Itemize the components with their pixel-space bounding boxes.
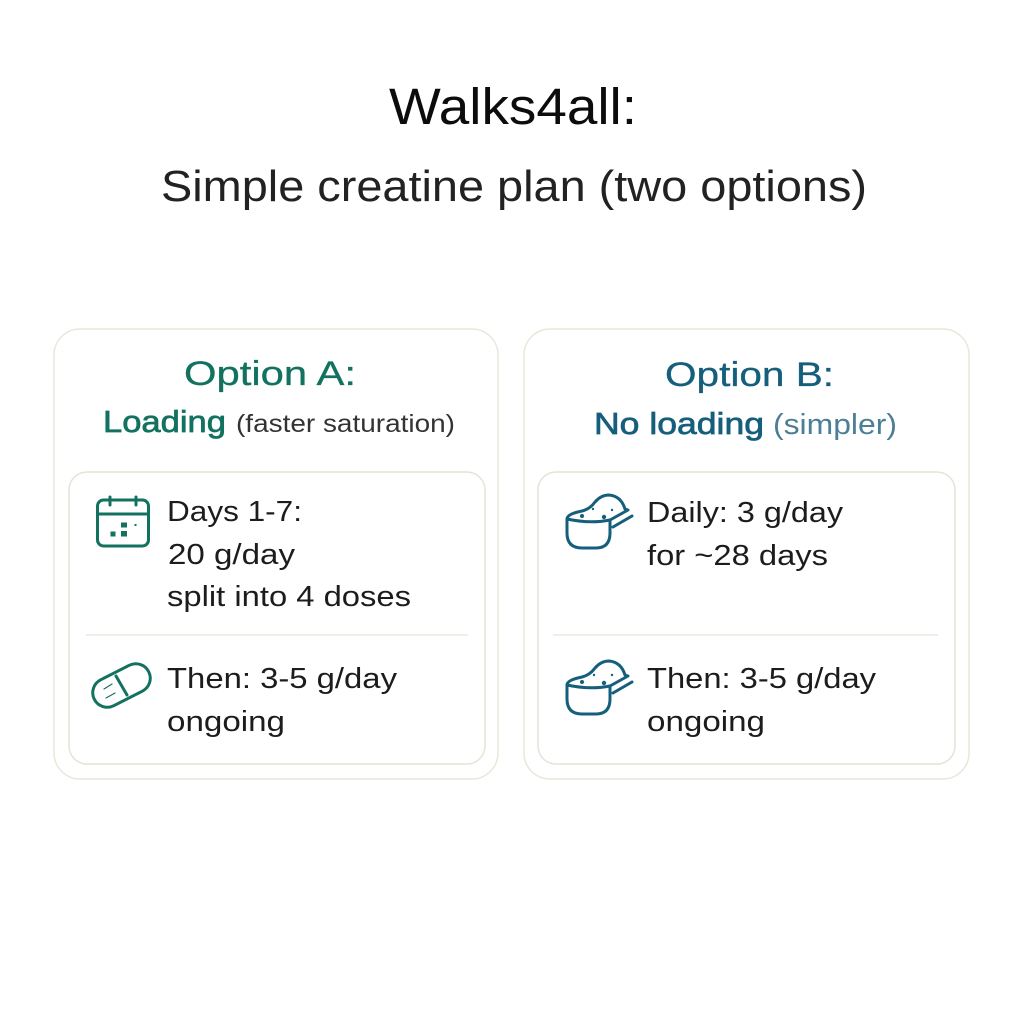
text: days 1-7 [167,496,411,613]
icon: calendar [98,497,148,546]
title: Walks4all: [389,78,637,135]
panel: option B [524,329,969,779]
text: then B: ongoing [647,706,765,738]
text: daily: Daily: 3 g/day [647,497,844,529]
subheading: no loading: No loading [594,406,764,441]
text: daily: for ~28 days [647,540,828,572]
heading: option A: Option A: [184,355,356,393]
text: days 1-7: split into 4 doses [167,581,411,613]
icon: scoop 2 [567,661,632,714]
text: days 1-7: Days 1-7: [167,496,302,528]
subheading: loading: Loading [103,404,226,439]
text: then B: Then: 3-5 g/day [647,663,877,695]
heading: option B: Option B: [665,356,834,394]
inner card: option B steps [538,472,955,764]
subheading: loading: (faster saturation) [236,410,455,438]
subheading: no loading: (simpler) [773,409,897,441]
icon: scoop 1 [567,495,632,548]
text: then A: ongoing [167,706,285,738]
text: then B [647,663,877,738]
subheading: loading [103,404,455,439]
text: then A [167,663,398,738]
subtitle: Simple creatine plan (two options) [161,162,867,211]
inner card: option A steps [69,472,485,764]
text: days 1-7: 20 g/day [168,539,296,571]
text: then A: Then: 3-5 g/day [167,663,398,695]
icon: capsule [88,659,155,712]
panel: option A [54,329,498,779]
text: daily [647,497,844,572]
subheading: no loading [594,406,897,441]
